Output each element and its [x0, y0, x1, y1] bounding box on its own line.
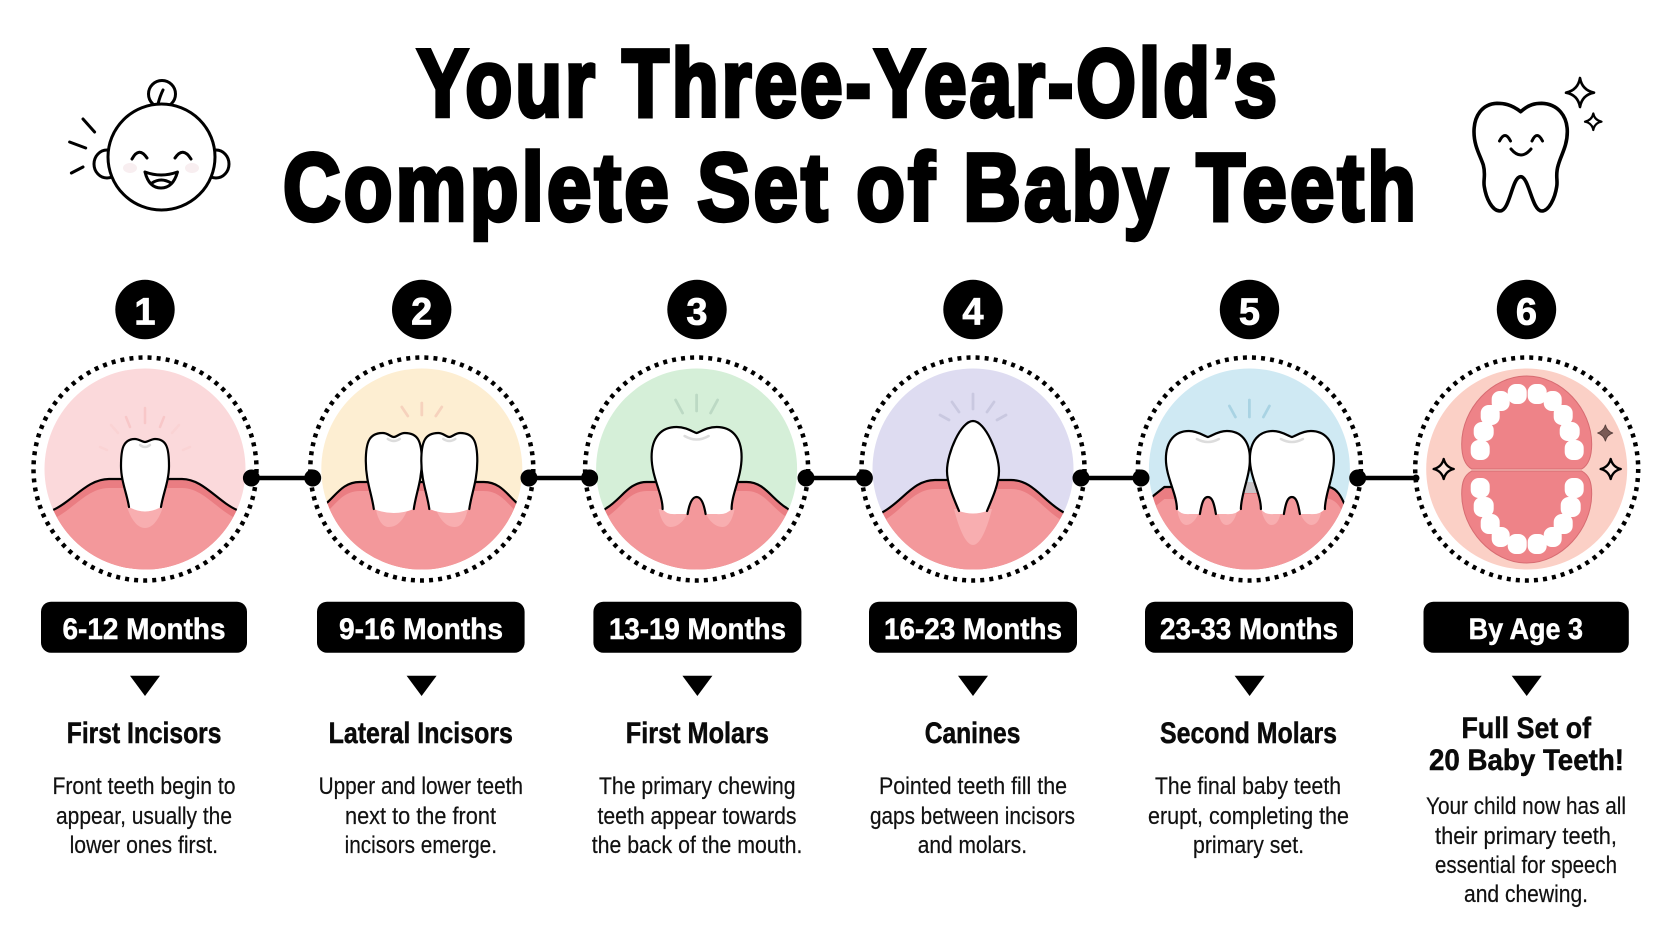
description: and molars. [918, 832, 1027, 859]
description: incisors emerge. [345, 832, 497, 859]
step 4: canines [862, 280, 1084, 859]
icon: baby face [70, 80, 229, 210]
illustration: canine circle [862, 358, 1084, 588]
number badge 1: 1 [134, 292, 156, 334]
step 6: full set [1415, 280, 1638, 908]
number badge 6 [1497, 280, 1556, 339]
step 5: second molars [1138, 280, 1361, 859]
description: erupt, completing the [1148, 803, 1349, 830]
number badge 3 [667, 280, 727, 339]
number badge 4: 4 [962, 292, 984, 334]
description: next to the front [345, 803, 496, 830]
number badge 4 [943, 280, 1003, 339]
arrow down [407, 676, 437, 696]
title [283, 30, 1416, 241]
icon: smiling tooth with sparkles [1474, 78, 1602, 211]
description: teeth appear towards [598, 803, 796, 830]
heading: lateral incisors: Lateral Incisors [329, 717, 513, 750]
description: Your child now has all [1426, 793, 1626, 820]
description: Pointed teeth fill the [879, 773, 1067, 800]
description: appear, usually the [56, 803, 232, 830]
arrow down [958, 676, 988, 696]
number badge 2 [392, 280, 451, 339]
number badge 3: 3 [686, 292, 708, 334]
age pill: 9-16 months [317, 602, 525, 653]
heading: canines: Canines [925, 717, 1020, 750]
age pill: 23-33 months [1145, 602, 1353, 653]
step 2: lateral incisors [310, 280, 533, 859]
sparkles [1434, 425, 1621, 479]
heading: full set of 20 baby teeth: 20 Baby Teeth! [1429, 744, 1624, 777]
number badge 5 [1220, 280, 1279, 339]
number badge 5: 5 [1239, 292, 1260, 334]
arrow down [1512, 676, 1542, 696]
number badge 6: 6 [1516, 292, 1537, 334]
age pill: 13-19 months: 13-19 Months [609, 613, 786, 646]
heading: full set of 20 baby teeth: Full Set of [1462, 712, 1591, 745]
arrow down [130, 676, 160, 696]
heading: first molars: First Molars [626, 717, 769, 750]
upper arch [1462, 376, 1592, 469]
age pill: 23-33 months: 23-33 Months [1160, 613, 1338, 646]
description: The final baby teeth [1155, 773, 1341, 800]
age pill: 13-19 months [593, 602, 801, 653]
step 3: first molars [585, 280, 808, 859]
title: Complete Set of Baby Teeth [283, 133, 1416, 241]
step 1: first incisors [34, 280, 256, 859]
heading: second molars: Second Molars [1160, 717, 1337, 750]
description: essential for speech [1435, 852, 1617, 879]
lower arch [1462, 471, 1592, 563]
timeline connectors [243, 470, 1419, 486]
description: lower ones first. [70, 832, 218, 859]
description [1426, 793, 1626, 908]
heading: first incisors: First Incisors [67, 717, 221, 750]
illustration: full mouth circle [1415, 358, 1638, 580]
description [52, 773, 236, 859]
title: Your Three-Year-Old’s [417, 30, 1277, 137]
description [592, 773, 802, 859]
description: their primary teeth, [1435, 823, 1617, 850]
description [1148, 773, 1349, 859]
illustration: first incisor circle [34, 358, 256, 588]
age pill: 6-12 months: 6-12 Months [62, 613, 226, 646]
description: Upper and lower teeth [319, 773, 523, 800]
illustration: second molars circle [1138, 358, 1361, 591]
illustration: first molar circle [585, 358, 808, 588]
age pill: 9-16 months: 9-16 Months [339, 613, 503, 646]
description [319, 773, 523, 859]
description: primary set. [1193, 832, 1304, 859]
number badge 1 [115, 280, 175, 339]
description: The primary chewing [599, 773, 796, 800]
description [870, 773, 1075, 859]
description: the back of the mouth. [592, 832, 802, 859]
description: and chewing. [1464, 881, 1588, 908]
age pill: by age 3: By Age 3 [1469, 613, 1583, 646]
age pill: 16-23 months [869, 602, 1077, 653]
age pill: by age 3 [1424, 602, 1629, 653]
illustration: lateral incisors circle [310, 358, 533, 588]
arrow down [1235, 676, 1265, 696]
arrow down [682, 676, 712, 696]
heading: full set of 20 baby teeth [1429, 712, 1624, 777]
age pill: 6-12 months [41, 602, 247, 653]
age pill: 16-23 months: 16-23 Months [884, 613, 1062, 646]
description: gaps between incisors [870, 803, 1075, 830]
number badge 2: 2 [411, 292, 432, 334]
description: Front teeth begin to [52, 773, 236, 800]
